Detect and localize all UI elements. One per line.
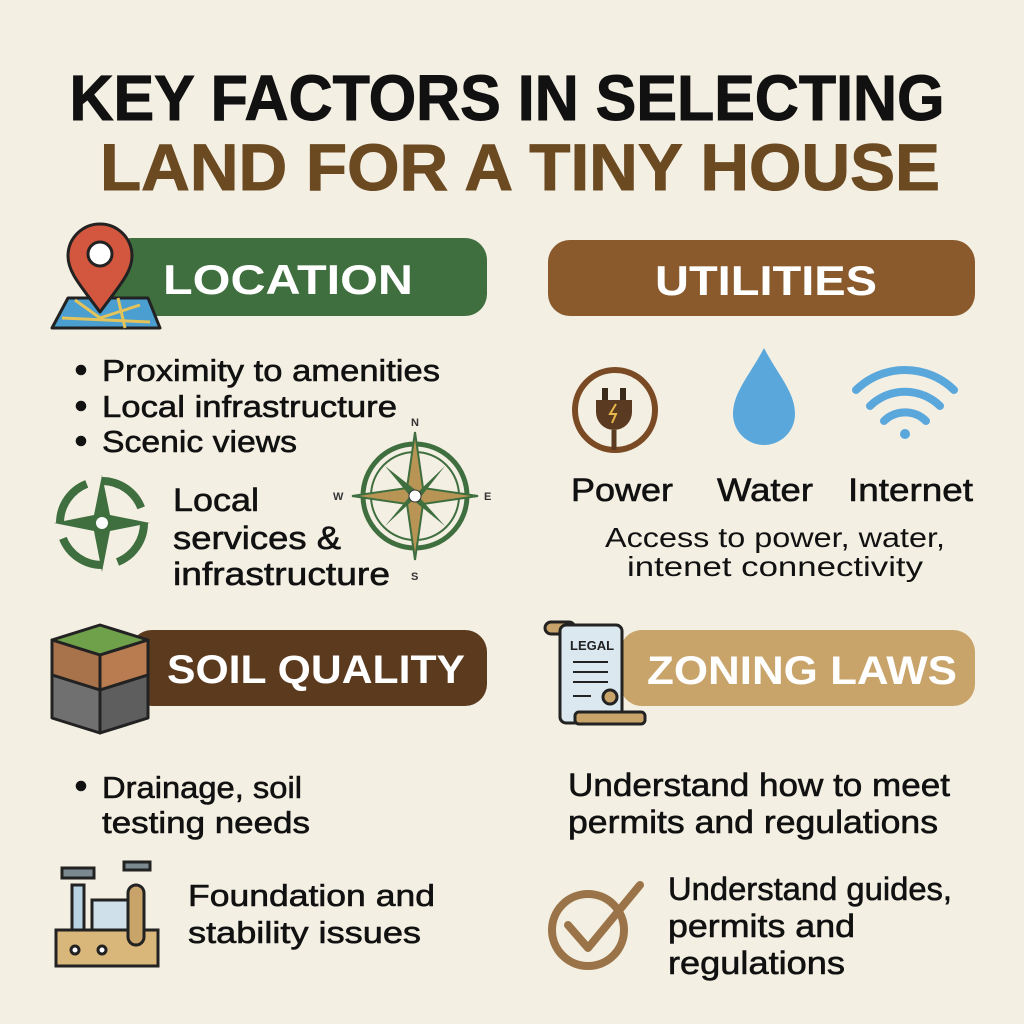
icon: lab equipment	[56, 862, 158, 966]
text: zoning check	[668, 871, 952, 981]
text: utilities description	[605, 522, 945, 582]
text: utilities description: Access to power, water,	[605, 522, 945, 553]
bullet: drainage: Drainage, soil	[102, 770, 302, 805]
icon: big compass: N	[411, 417, 419, 429]
heading: zoning pill: ZONING LAWS	[647, 649, 957, 693]
heading: location pill: LOCATION	[163, 256, 413, 303]
heading: utilities pill	[548, 240, 975, 316]
bullet: drainage: testing needs	[102, 805, 310, 840]
icon: big compass: S	[411, 571, 418, 583]
panel: location	[52, 224, 491, 592]
icon: water drop	[733, 348, 795, 445]
title	[70, 62, 944, 204]
icon: legal scroll	[545, 622, 645, 724]
heading: zoning pill	[620, 630, 975, 706]
labels: utilities: Water	[717, 472, 813, 508]
text: foundation	[188, 878, 435, 950]
text: local services: infrastructure	[173, 556, 390, 592]
text: zoning description: permits and regulations	[568, 804, 938, 840]
icon: legal scroll: LEGAL	[570, 638, 614, 653]
icon: wifi	[856, 370, 954, 439]
bullet: drainage	[76, 770, 310, 840]
title: LAND FOR A TINY HOUSE	[100, 130, 940, 204]
icon: big compass: W	[333, 491, 344, 503]
icon: big compass	[333, 417, 491, 583]
text: foundation: stability issues	[188, 915, 421, 950]
text: local services: services &	[173, 520, 341, 556]
icon: map pin	[52, 224, 160, 328]
text: zoning check: regulations	[668, 945, 845, 981]
labels: utilities: Internet	[848, 472, 973, 508]
text: foundation: Foundation and	[188, 878, 435, 913]
icon: small compass	[54, 475, 150, 572]
text: zoning check: permits and	[668, 908, 855, 944]
icon: power plug	[575, 370, 655, 450]
icon: check	[552, 885, 640, 966]
text: utilities description: intenet connectivity	[627, 551, 923, 582]
panel: utilities	[548, 240, 975, 582]
title: KEY FACTORS IN SELECTING	[70, 62, 944, 134]
text: zoning check: Understand guides,	[668, 871, 952, 907]
icon: big compass: E	[484, 491, 491, 503]
panel: zoning laws	[545, 622, 975, 981]
heading: soil pill: SOIL QUALITY	[167, 648, 465, 692]
text: zoning description	[568, 767, 950, 840]
text: local services	[173, 482, 390, 592]
labels: utilities	[571, 472, 973, 508]
bullets: location: Proximity to amenities	[102, 353, 440, 388]
bullets: location: Scenic views	[102, 424, 297, 459]
heading: location pill	[110, 238, 487, 316]
bullets: location: Local infrastructure	[102, 389, 397, 424]
heading: utilities pill: UTILITIES	[655, 257, 877, 304]
labels: utilities: Power	[571, 472, 673, 508]
panel: soil quality	[52, 625, 487, 966]
bullets: location	[76, 353, 440, 459]
text: local services: Local	[173, 482, 259, 518]
heading: soil pill	[130, 630, 487, 706]
text: zoning description: Understand how to meet	[568, 767, 950, 803]
icon: soil layers	[52, 625, 148, 733]
